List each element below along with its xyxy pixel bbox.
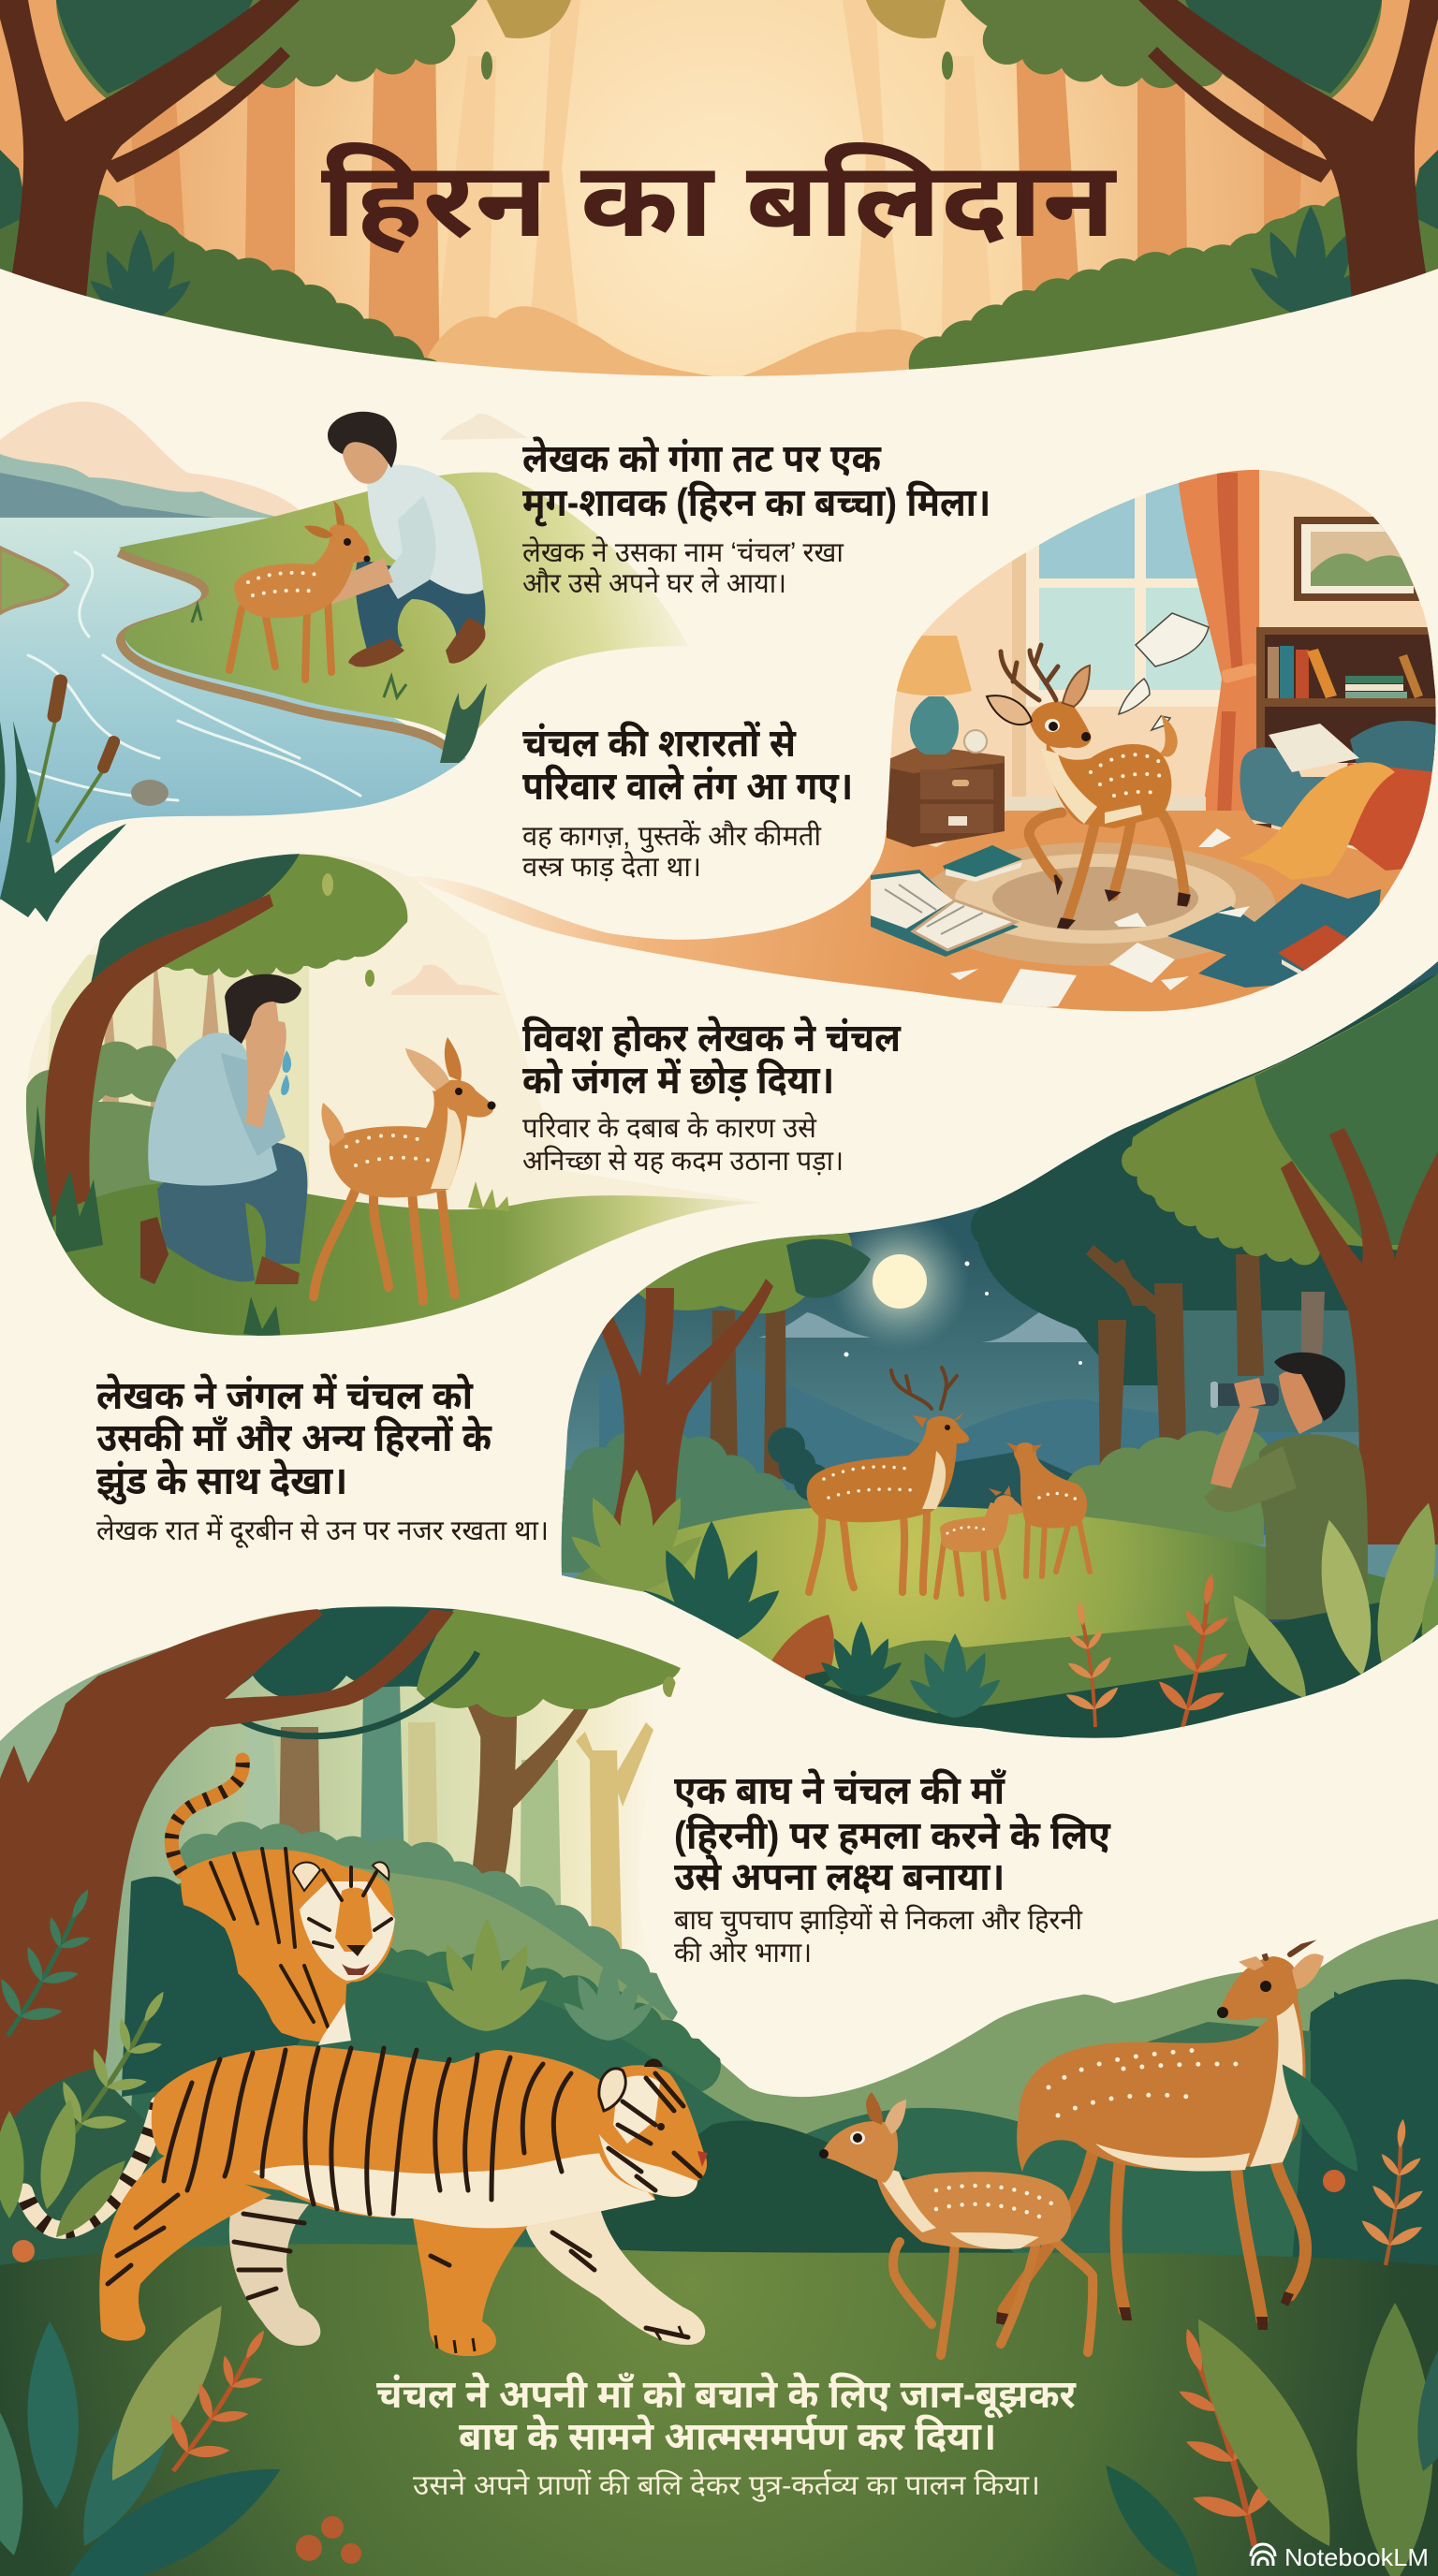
foreground plants — [0, 1871, 1438, 2576]
text block: step 3: परिवार के दबाब के कारण उसे — [522, 1111, 817, 1144]
window — [1012, 473, 1227, 810]
text block: step 4 — [96, 1373, 549, 1548]
text block: step 1: और उसे अपने घर ले आया। — [522, 566, 786, 599]
text block: step 2: परिवार वाले तंग आ गए। — [522, 764, 853, 808]
sofa — [1240, 721, 1437, 861]
stag — [807, 1368, 969, 1592]
text block: step 2: चंचल की शरारतों से — [522, 721, 797, 765]
panel: title banner forest — [0, 0, 1438, 393]
panel: step 3 releasing deer in forest — [19, 842, 768, 1348]
text block: step 1: मृग-शावक (हिरन का बच्चा) मिला। — [522, 480, 990, 527]
framed picture — [1294, 517, 1419, 601]
big tree trunk — [0, 1609, 454, 2172]
text block: step 1: लेखक को गंगा तट पर एक — [522, 436, 882, 480]
text block: step 1: लेखक ने उसका नाम ‘चंचल’ रखा — [522, 535, 844, 568]
text block: step 3: विवश होकर लेखक ने चंचल — [522, 1016, 902, 1060]
man kneeling and crying — [140, 974, 307, 1284]
table lamp — [896, 636, 987, 754]
text block: step 5: उसे अपना लक्ष्य बनाया। — [674, 1854, 1005, 1898]
text block: step 1 — [522, 436, 990, 599]
right canopy — [866, 0, 1382, 103]
grass hill — [28, 1105, 763, 1340]
orange trunks — [126, 37, 1306, 393]
tree canopy — [89, 854, 407, 992]
text block: step 4: लेखक ने जंगल में चंचल को — [96, 1373, 474, 1417]
pale distant trees — [431, 0, 997, 393]
text block: step 2: वस्त्र फाड़ देता था। — [522, 850, 701, 883]
background trunks — [710, 1245, 1325, 1488]
text block: step 5: बाघ चुपचाप झाड़ियों से निकला और हिरनी — [674, 1903, 1083, 1937]
fawn — [229, 501, 371, 680]
panel: step 4 night forest with deer family — [552, 955, 1438, 1741]
doe — [314, 1037, 496, 1301]
stag — [996, 1852, 1372, 2330]
distant hills — [599, 1365, 1311, 1535]
room wall — [403, 459, 1438, 1020]
sunlit background — [0, 0, 1438, 384]
small tiger in bushes — [171, 1760, 395, 2045]
doe — [1006, 1442, 1090, 1576]
ground — [0, 2244, 1438, 2576]
grassy bank — [119, 472, 688, 763]
text block: step 5 — [674, 1768, 1111, 1969]
text block: step 6: उसने अपने प्राणों की बलि देकर पुत्र-कर्तव्य का पालन किया। — [413, 2468, 1040, 2502]
background hills — [0, 402, 529, 520]
curtain — [1177, 468, 1259, 818]
fawn — [936, 1486, 1023, 1599]
bookshelf — [1256, 627, 1438, 763]
NotebookLM watermark: NotebookLM — [1284, 2543, 1429, 2571]
text block: step 5: (हिरनी) पर हमला करने के लिए — [674, 1813, 1111, 1857]
man crouching — [325, 412, 485, 667]
text block: step 6: चंचल ने अपनी माँ को बचाने के लिए जान-बूझकर — [376, 2372, 1077, 2419]
text block: step 2 — [522, 721, 853, 883]
text block: step 2: वह कागज़, पुस्तकें और कीमती — [522, 820, 822, 853]
forest backdrop — [26, 854, 761, 1310]
orange blanket — [1240, 762, 1438, 880]
tree trunk — [45, 894, 273, 1236]
flying and scattered papers — [950, 613, 1250, 1011]
night sky — [552, 955, 1438, 1741]
text block: step 5: की ओर भागा। — [674, 1937, 812, 1969]
cattail reeds — [0, 673, 126, 922]
river island — [0, 548, 67, 613]
big tiger — [24, 2045, 708, 2356]
hanging vine — [242, 1652, 477, 1736]
baseboard and carpet floor — [403, 797, 1438, 1020]
fawn — [819, 2092, 1093, 2355]
dark bush covering tiger — [122, 1903, 300, 2097]
text block: step 6 — [376, 2372, 1077, 2502]
top right tree — [1132, 973, 1438, 1544]
dark foreground trees — [0, 0, 1438, 318]
text block: step 5: एक बाघ ने चंचल की माँ — [674, 1768, 1007, 1812]
man with binoculars — [1205, 1353, 1369, 1685]
blue cloth — [1167, 884, 1381, 988]
canopy leaves — [159, 1603, 681, 1717]
top left tree — [599, 1232, 871, 1535]
open book and closed book — [871, 845, 1022, 957]
moon and clouds — [758, 1211, 1114, 1365]
text block: step 3: अनिच्छा से यह कदम उठाना पड़ा। — [522, 1144, 844, 1177]
panel: step 5 and 6 tiger and deer jungle — [0, 1591, 1438, 2576]
red book — [1278, 925, 1348, 973]
text block: step 3: को जंगल में छोड़ दिया। — [522, 1058, 834, 1102]
dark forest canopy — [978, 973, 1438, 1432]
pale forest backdrop — [0, 1591, 1438, 2576]
distant trunks — [245, 1660, 653, 1977]
panel: step 1 riverbank scene — [0, 402, 688, 922]
text block: step 3 — [522, 1016, 902, 1177]
mid bushes — [0, 1851, 1438, 2284]
text block: step 4: उसकी माँ और अन्य हिरनों के — [96, 1415, 492, 1459]
foreground plants — [564, 1470, 1438, 1741]
deer with antlers — [987, 645, 1189, 928]
nightstand — [887, 745, 1005, 847]
left canopy — [56, 0, 571, 103]
text block: step 4: झुंड के साथ देखा। — [96, 1458, 347, 1505]
text block: step 4: लेखक रात में दूरबीन से उन पर नजर रखता था। — [96, 1514, 549, 1548]
panel: step 2 messy room scene — [403, 459, 1438, 1020]
text block: step 6: बाघ के सामने आत्मसमर्पण कर दिया। — [459, 2414, 996, 2458]
bottom bushes — [0, 150, 1438, 393]
mid bushes — [562, 1432, 1264, 1573]
forest clearing — [562, 1506, 1438, 1741]
cloud — [391, 965, 501, 995]
river — [0, 518, 466, 900]
title: हिरन का बलिदान — [321, 141, 1117, 258]
